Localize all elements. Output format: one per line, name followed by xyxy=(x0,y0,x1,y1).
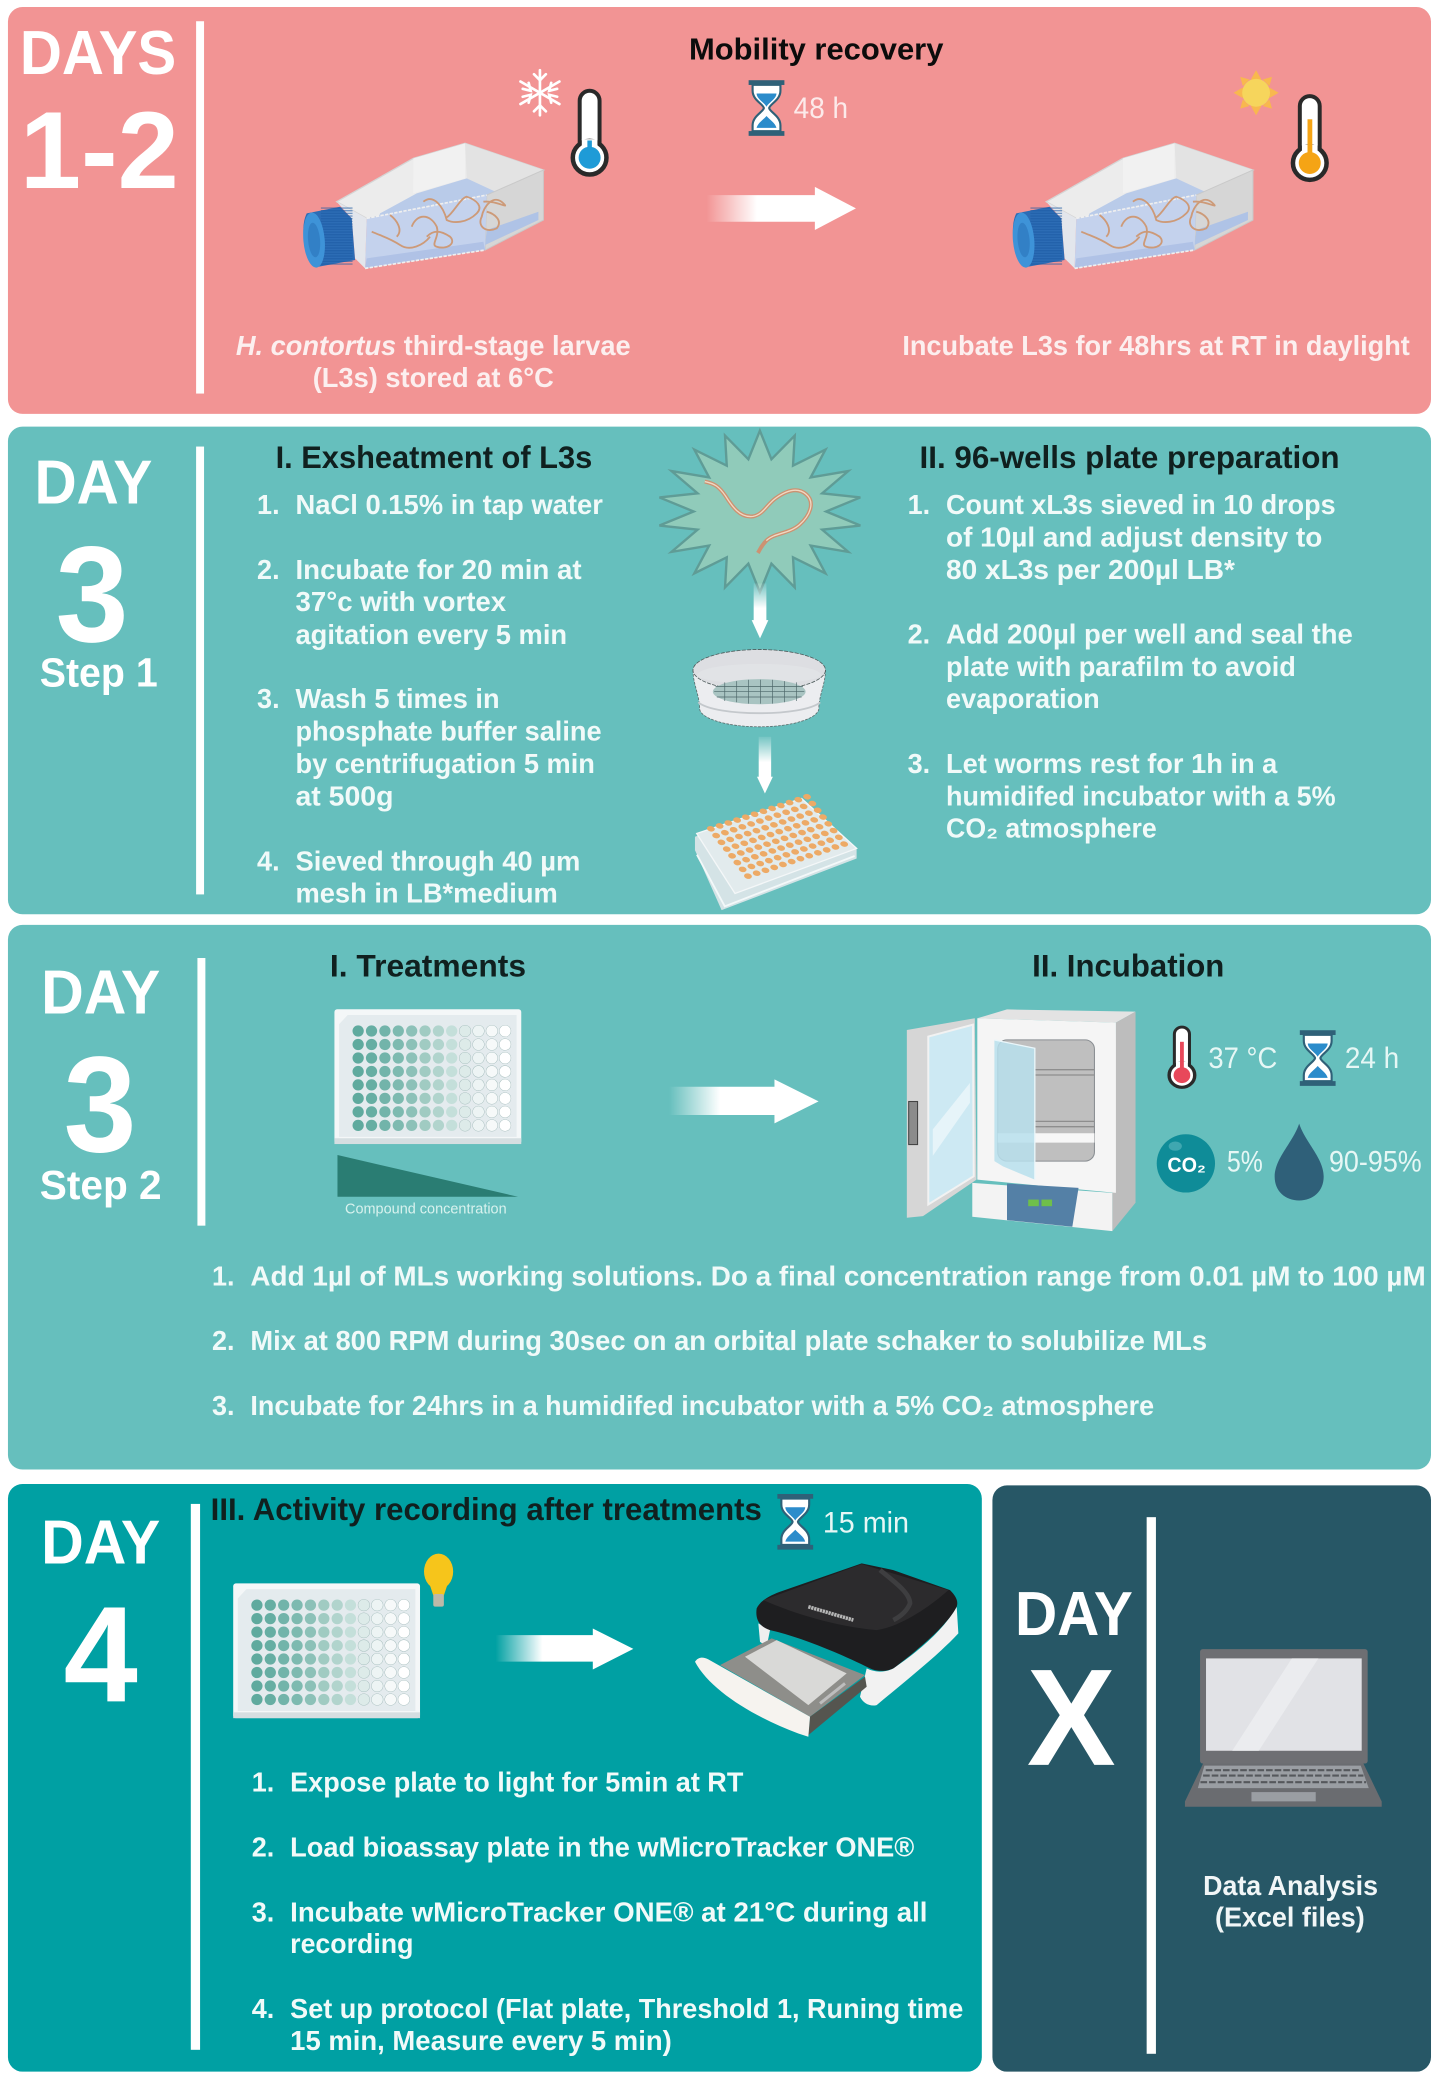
list: exsheatment steps: 37°c with vortex xyxy=(295,586,507,617)
list: treatment steps: 2. xyxy=(212,1325,235,1356)
icon: laptop xyxy=(1185,1649,1382,1807)
heading: day 3 step 2: Step 2 xyxy=(40,1162,162,1208)
list: plate preparation steps: plate with parafilm to avoid xyxy=(946,651,1296,682)
chart: compound concentration wedge xyxy=(337,1155,518,1197)
list: plate preparation steps: humidifed incubator with a 5% xyxy=(946,781,1336,812)
list: recording steps: Expose plate to light for 5min at RT xyxy=(290,1766,743,1797)
list: plate preparation steps: of 10µl and adjust density to xyxy=(946,522,1322,553)
panel: day X xyxy=(992,1485,1431,2072)
list: exsheatment steps: phosphate buffer saline xyxy=(295,716,602,747)
heading: day 3 step 1: DAY xyxy=(34,449,152,518)
list: plate preparation steps: 2. xyxy=(908,618,930,649)
heading: day 3 step 2: DAY xyxy=(41,959,160,1028)
list: exsheatment steps: 2. xyxy=(257,554,280,585)
list: exsheatment steps: mesh in LB*medium xyxy=(295,877,558,908)
icon: light bulb xyxy=(424,1554,453,1607)
text: data analysis xyxy=(1203,1870,1378,1933)
panel: day 3 step 1 xyxy=(8,427,1431,914)
list: plate preparation steps: Let worms rest for 1h in a xyxy=(946,748,1278,779)
list: recording steps: 2. xyxy=(252,1831,274,1862)
icon: humidity drop xyxy=(1275,1124,1324,1200)
icon: plate under light xyxy=(233,1583,420,1718)
heading: mobility recovery: Mobility recovery xyxy=(689,33,943,67)
list: exsheatment steps: at 500g xyxy=(295,781,394,812)
text: stored larvae xyxy=(236,330,631,393)
heading: day 3 step 2 xyxy=(40,959,162,1208)
arrow: plate to reader xyxy=(496,1628,633,1670)
list: exsheatment steps: Incubate for 20 min at xyxy=(295,554,582,585)
icon: red thermometer xyxy=(1169,1027,1195,1087)
icon: hourglass 48 h xyxy=(749,80,784,136)
heading: day 4: DAY xyxy=(41,1509,160,1578)
list: plate preparation steps xyxy=(908,489,1353,843)
heading: day X xyxy=(1015,1580,1133,1795)
list: plate preparation steps: 1. xyxy=(908,489,930,520)
list: recording steps: 3. xyxy=(252,1896,274,1927)
heading: days 1-2: 1-2 xyxy=(20,89,179,212)
list: treatment steps: Add 1µl of MLs working solutions. Do a final concentration range from 0.01 µM to 100 µM xyxy=(250,1260,1426,1291)
list: plate preparation steps: Add 200µl per well and seal the xyxy=(946,618,1353,649)
list: treatment steps: 3. xyxy=(212,1390,235,1421)
text block: exsheatment of L3s xyxy=(257,439,603,908)
panel: days 1-2 xyxy=(8,7,1431,414)
list: exsheatment steps: 4. xyxy=(257,846,280,877)
icon: flask with larvae, cold xyxy=(301,143,543,269)
arrow: to incubation xyxy=(706,187,856,230)
list: exsheatment steps: NaCl 0.15% in tap water xyxy=(295,489,603,520)
text: data analysis: Data Analysis xyxy=(1203,1870,1378,1901)
icon: cold thermometer xyxy=(573,91,606,175)
list: treatment steps xyxy=(212,1260,1426,1421)
heading: day 4: 4 xyxy=(64,1577,138,1730)
list: treatment steps: 1. xyxy=(212,1260,235,1291)
panel: day 4 xyxy=(8,1484,982,2072)
icon: 96-well plate with larvae xyxy=(695,795,857,910)
list: recording steps: Incubate wMicroTracker ONE® at 21°C during all xyxy=(290,1896,928,1927)
list: exsheatment steps: Wash 5 times in xyxy=(295,683,500,714)
list: recording steps: 4. xyxy=(252,1993,274,2024)
arrow: treatments to incubation xyxy=(669,1079,819,1123)
list: plate preparation steps: Count xL3s sieved in 10 drops xyxy=(946,489,1336,520)
arrow: burst to sieve xyxy=(752,583,768,638)
heading: day 3 step 2: 3 xyxy=(64,1027,136,1180)
list: plate preparation steps: CO₂ atmosphere xyxy=(946,812,1157,843)
list: recording steps xyxy=(252,1766,963,2056)
heading: days 1-2 xyxy=(20,19,179,212)
text: stored larvae: H. contortus third-stage larvae xyxy=(236,330,631,361)
icon: CO2 bubble xyxy=(1157,1134,1215,1193)
heading: day 3 step 1 xyxy=(34,449,158,695)
value: humidity: 90-95% xyxy=(1329,1146,1422,1178)
value: 37 degrees: 37 °C xyxy=(1208,1043,1277,1075)
icon: sun xyxy=(1234,70,1279,115)
icon: treated 96-well plate xyxy=(334,1009,521,1144)
text: incubate larvae: Incubate L3s for 48hrs at RT in daylight xyxy=(902,330,1410,361)
heading: day X: DAY xyxy=(1015,1580,1133,1649)
text: stored larvae: (L3s) stored at 6°C xyxy=(313,362,554,393)
arrow: sieve to plate xyxy=(757,737,773,793)
icon: wMicroTracker reader xyxy=(695,1563,958,1737)
heading: day 3 step 1: Step 1 xyxy=(40,649,158,695)
heading: day 4 xyxy=(41,1509,160,1730)
icon: incubator xyxy=(907,1009,1136,1231)
list: exsheatment steps: Sieved through 40 µm xyxy=(295,846,580,877)
text block: plate preparation xyxy=(908,439,1353,843)
list: recording steps: Load bioassay plate in the wMicroTracker ONE® xyxy=(290,1831,915,1862)
icon: hourglass 15 min xyxy=(777,1494,813,1550)
heading: exsheatment: I. Exsheatment of L3s xyxy=(276,439,592,475)
list: exsheatment steps: 3. xyxy=(257,683,280,714)
heading: day 3 step 1: 3 xyxy=(56,517,129,670)
list: recording steps: recording xyxy=(290,1928,413,1959)
heading: activity recording: III. Activity recording after treatments xyxy=(211,1491,762,1527)
heading: incubation: II. Incubation xyxy=(1032,948,1224,984)
icon: snowflake xyxy=(520,70,559,115)
heading: day X: X xyxy=(1027,1641,1116,1795)
value: 5 percent: 5% xyxy=(1227,1146,1263,1178)
list: exsheatment steps: by centrifugation 5 min xyxy=(295,748,595,779)
list: exsheatment steps: agitation every 5 min xyxy=(295,619,567,650)
value: 24 h: 24 h xyxy=(1345,1043,1399,1075)
list: treatment steps: Mix at 800 RPM during 30sec on an orbital plate schaker to solubilize MLs xyxy=(250,1325,1207,1356)
label: compound concentration: Compound concentration xyxy=(345,1202,507,1218)
text: data analysis: (Excel files) xyxy=(1215,1902,1365,1933)
list: recording steps: 15 min, Measure every 5 min) xyxy=(290,2025,672,2056)
list: recording steps: 1. xyxy=(252,1766,274,1797)
list: treatment steps: Incubate for 24hrs in a humidifed incubator with a 5% CO₂ atmosphere xyxy=(250,1390,1154,1421)
icon: exsheathing larva burst xyxy=(659,431,860,592)
heading: treatments: I. Treatments xyxy=(330,948,526,984)
list: exsheatment steps xyxy=(257,489,603,908)
duration: 48 h: 48 h xyxy=(794,93,848,125)
list: exsheatment steps: 1. xyxy=(257,489,280,520)
icon: CO2 bubble: CO₂ xyxy=(1167,1154,1206,1177)
icon: flask with larvae, room temperature xyxy=(1011,143,1253,269)
list: recording steps: Set up protocol (Flat plate, Threshold 1, Runing time xyxy=(290,1993,963,2024)
list: plate preparation steps: 80 xL3s per 200µl LB* xyxy=(946,554,1235,585)
heading: plate preparation: II. 96-wells plate preparation xyxy=(920,439,1340,475)
panel: day 3 step 2 xyxy=(8,925,1431,1469)
heading: days 1-2: DAYS xyxy=(20,19,176,88)
list: plate preparation steps: evaporation xyxy=(946,683,1100,714)
icon: sieve xyxy=(693,650,825,727)
icon: hourglass 24 h xyxy=(1300,1030,1336,1086)
list: plate preparation steps: 3. xyxy=(908,748,930,779)
value: 15 min: 15 min xyxy=(823,1507,909,1539)
icon: warm thermometer xyxy=(1293,96,1327,180)
